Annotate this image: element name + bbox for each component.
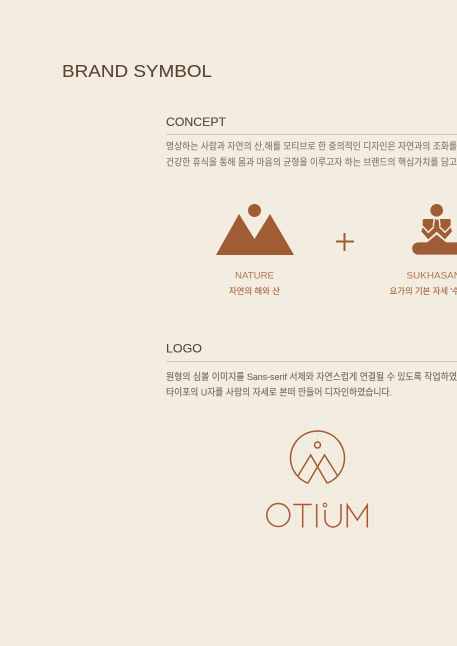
heading: logo: LOGO bbox=[166, 342, 202, 356]
text block: concept description bbox=[166, 140, 457, 168]
heading: concept: CONCEPT bbox=[166, 115, 227, 129]
label: nature: NATURE bbox=[235, 270, 274, 282]
label: nature bbox=[229, 270, 280, 296]
icon: nature mountains and sun bbox=[216, 204, 294, 255]
panel: concept bbox=[166, 115, 457, 168]
gaps between arm segments bbox=[422, 218, 451, 232]
text block: logo description bbox=[166, 371, 457, 398]
arms silhouette bbox=[421, 219, 452, 239]
logo: otium bbox=[267, 431, 367, 528]
logo emblem bbox=[290, 431, 345, 483]
text block: logo description: 타이포의 U자를 사람의 자세로 본떠 만들어 디자인하였습니다. bbox=[166, 386, 392, 398]
title: BRAND SYMBOL bbox=[62, 61, 212, 81]
icon: sukhasana meditating figure bbox=[412, 204, 457, 255]
icon: plus bbox=[336, 233, 354, 251]
logo construction grid bbox=[251, 419, 384, 540]
torso bbox=[426, 235, 448, 244]
crossed legs bbox=[412, 242, 457, 255]
label: nature: 자연의 해와 산 bbox=[229, 286, 280, 296]
label: sukhasana bbox=[390, 270, 457, 296]
panel: logo bbox=[166, 342, 457, 398]
logo wordmark bbox=[267, 503, 367, 528]
